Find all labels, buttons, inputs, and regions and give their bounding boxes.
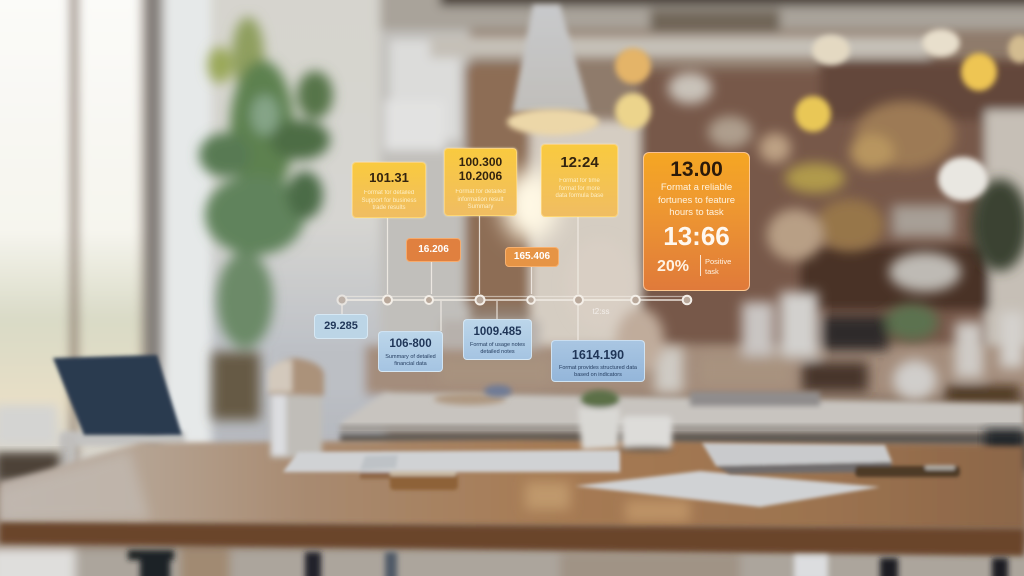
second table — [340, 385, 1024, 470]
foreground table top — [0, 440, 1024, 556]
card value: 106-800 — [389, 338, 432, 350]
lamp glow — [507, 109, 599, 135]
card caption: format for more — [559, 186, 600, 192]
card caption: Format of usage notes — [470, 342, 525, 348]
card stat row — [657, 255, 731, 276]
card large value: 13:66 — [663, 220, 730, 250]
warm glow behind timeline — [502, 169, 558, 241]
card: 1614.190 — [551, 340, 645, 382]
card description: hours to task — [669, 207, 724, 218]
card value — [459, 155, 502, 182]
card description — [658, 182, 735, 218]
card value: 100.300 — [459, 155, 502, 169]
small axis label: t2:ss — [593, 307, 609, 316]
tag: 16.206: 16.206 — [418, 244, 449, 255]
percent value: 20% — [657, 258, 689, 275]
table legs — [128, 550, 1008, 576]
tag: 165.406: 165.406 — [514, 251, 550, 262]
tag: 165.406 — [505, 247, 559, 267]
card description: Format a reliable — [661, 182, 732, 193]
card: 12:24 — [541, 144, 618, 217]
card caption — [559, 365, 637, 378]
card caption: Format provides structured data — [559, 365, 637, 371]
pendant lamp — [512, 5, 590, 112]
card value: 1614.190 — [572, 348, 624, 362]
card value: 1009.485 — [474, 326, 521, 338]
card: 101.31 — [352, 162, 426, 218]
tag: 16.206 — [406, 238, 461, 262]
card caption — [470, 342, 525, 355]
card caption: Format for time — [559, 178, 600, 184]
card description: fortunes to feature — [658, 194, 735, 206]
card caption: information result — [457, 196, 504, 202]
card: 1009.485 — [463, 319, 532, 360]
connector stems — [342, 216, 578, 341]
card: 106-800 — [378, 331, 443, 372]
background blobs — [440, 72, 1024, 402]
lower area under table — [0, 548, 1024, 576]
plant — [199, 17, 333, 420]
timeline nodes — [338, 296, 691, 304]
card value: 29.285 — [324, 320, 358, 332]
card caption: trade results — [372, 205, 406, 211]
card caption: detailed notes — [480, 349, 515, 355]
card caption — [555, 178, 604, 199]
card caption — [385, 354, 436, 367]
card caption: Support for business — [361, 198, 417, 204]
thermos — [268, 358, 324, 458]
card caption: based on indicators — [574, 372, 622, 378]
card caption: Summary of detailed — [385, 354, 436, 360]
card value: 101.31 — [369, 170, 409, 185]
card value: 10.2006 — [459, 168, 502, 182]
white light spot — [938, 157, 988, 201]
card caption: Format for detailed — [455, 189, 506, 195]
stat caption: task — [705, 267, 719, 276]
bokeh lights — [615, 29, 1024, 132]
chair — [0, 355, 185, 482]
card caption: financial data — [394, 361, 427, 367]
card: 100.300 — [444, 148, 517, 216]
plant pot and cup — [578, 390, 674, 452]
card caption — [455, 189, 506, 210]
card: 13.00 — [643, 152, 750, 291]
stat caption — [705, 257, 731, 276]
stat caption: Positive — [705, 257, 731, 266]
card value: 12:24 — [560, 154, 599, 171]
card caption — [361, 190, 417, 211]
card heading: 13.00 — [670, 158, 723, 181]
card: 29.285 — [314, 314, 368, 339]
card caption: Format for detailed — [364, 190, 414, 196]
timeline rail — [346, 296, 690, 300]
card caption: data formula base — [555, 193, 604, 199]
papers on table — [283, 450, 880, 507]
laptop and pen — [702, 443, 960, 477]
card caption: Summary — [468, 204, 493, 210]
stat divider — [700, 255, 701, 276]
